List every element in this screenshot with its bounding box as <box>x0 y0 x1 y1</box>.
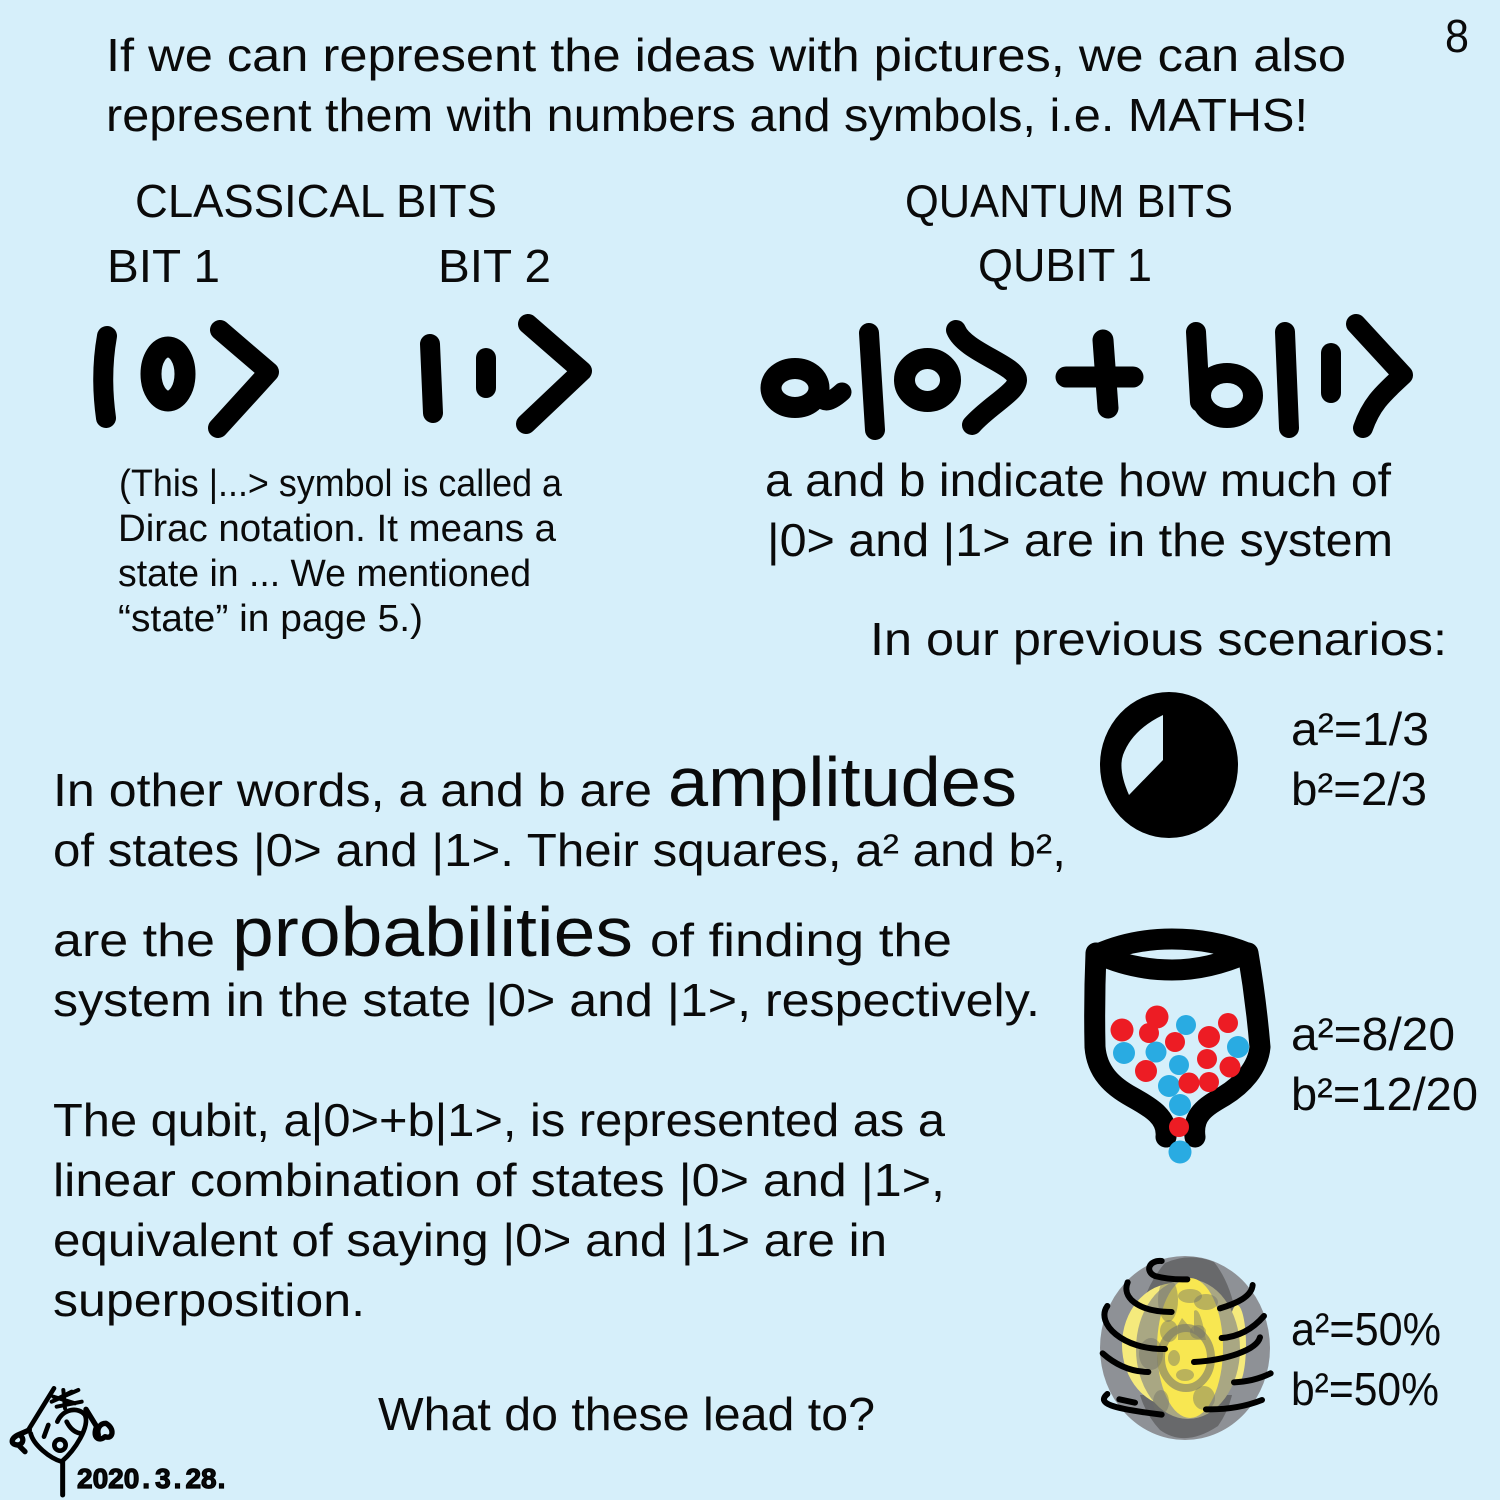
closing question: What do these lead to? <box>378 1388 875 1440</box>
text block: amplitudes and probabilities: system in the state |0> and |1>, respectively. <box>53 974 1040 1026</box>
label: bit 2: BIT 2 <box>438 240 551 292</box>
probabilities: funnel <box>1291 1008 1478 1120</box>
probabilities: pie <box>1291 703 1429 815</box>
motion lines <box>1103 1261 1271 1415</box>
probabilities: funnel: b²=12/20 <box>1291 1068 1478 1120</box>
label: qubit 1: QUBIT 1 <box>978 239 1152 291</box>
label: bit 1: BIT 1 <box>107 240 220 292</box>
panel: quantum bits <box>765 175 1447 665</box>
ket zero <box>103 330 269 428</box>
intro text: If we can represent the ideas with pictures, we can also <box>106 29 1346 81</box>
note on Dirac notation: (This |...> symbol is called a <box>119 463 563 505</box>
text block: superposition: linear combination of states |0> and |1>, <box>53 1154 945 1206</box>
qubit formula <box>771 324 1403 430</box>
probabilities: pie: b²=2/3 <box>1291 763 1427 815</box>
heading: quantum bits: QUANTUM BITS <box>905 175 1233 227</box>
emphasised word: probabilities: probabilities <box>232 893 633 971</box>
text block: superposition <box>53 1094 945 1326</box>
text block: superposition: superposition. <box>53 1274 365 1326</box>
note on Dirac notation: Dirac notation. It means a <box>118 508 557 550</box>
probabilities: pie: a²=1/3 <box>1291 703 1429 755</box>
emphasised word: amplitudes: amplitudes <box>668 743 1017 821</box>
explanation of a and b <box>765 454 1393 566</box>
icon: pie chart one third <box>1100 692 1238 838</box>
text block: amplitudes and probabilities: of states |0> and |1>. Their squares, a² and b², <box>53 824 1066 876</box>
probabilities: funnel: a²=8/20 <box>1291 1008 1455 1060</box>
intro text <box>106 29 1346 141</box>
red balls <box>1110 1006 1240 1137</box>
ket one <box>430 324 582 424</box>
text block: superposition: equivalent of saying |0> and |1> are in <box>53 1214 887 1266</box>
icon: funnel with balls <box>1095 939 1260 1164</box>
explanation of a and b: a and b indicate how much of <box>765 454 1391 506</box>
text block: amplitudes and probabilities: are the <box>53 914 215 966</box>
heading: classical bits: CLASSICAL BITS <box>135 175 497 227</box>
icon: author doodle <box>12 1388 112 1495</box>
note on Dirac notation: state in ... We mentioned <box>118 553 531 595</box>
probabilities: cat: b²=50% <box>1291 1363 1439 1415</box>
date: 2020.3.28. <box>77 1463 225 1494</box>
text block: amplitudes and probabilities: of finding the <box>650 914 952 966</box>
text block: amplitudes and probabilities <box>53 743 1066 1026</box>
note on Dirac notation: “state” in page 5.) <box>118 598 423 640</box>
blue balls <box>1113 1015 1249 1164</box>
page number: 8 <box>1445 10 1469 62</box>
intro text: represent them with numbers and symbols, i.e. MATHS! <box>106 89 1308 141</box>
panel: classical bits <box>103 175 582 640</box>
blurred cat shapes <box>1139 1278 1218 1414</box>
probabilities: cat: a²=50% <box>1291 1303 1441 1355</box>
text block: amplitudes and probabilities: In other words, a and b are <box>53 764 652 816</box>
scenarios heading: In our previous scenarios: <box>870 613 1447 665</box>
explanation of a and b: |0> and |1> are in the system <box>767 514 1393 566</box>
probabilities: cat <box>1291 1303 1441 1415</box>
icon: blurred spinning cat in box <box>1100 1256 1271 1440</box>
note on Dirac notation <box>118 463 563 640</box>
text block: superposition: The qubit, a|0>+b|1>, is represented as a <box>53 1094 945 1146</box>
